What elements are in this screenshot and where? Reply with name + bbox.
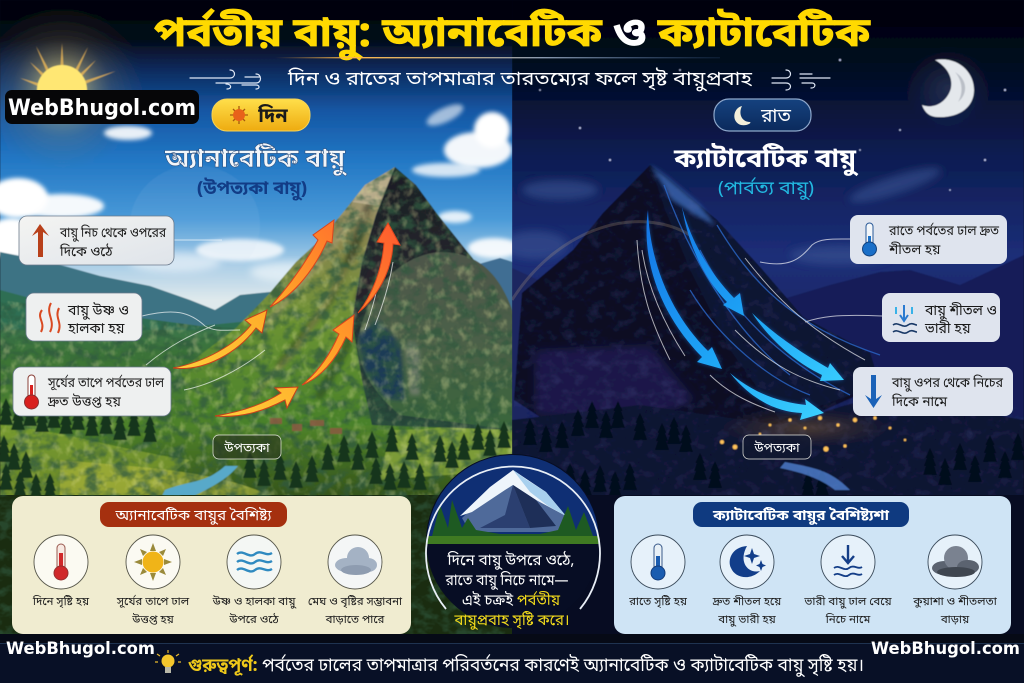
pill: night: রাত — [760, 105, 791, 130]
arrows: sinking cold air (katabatic) — [647, 207, 844, 420]
footer bar — [0, 643, 1024, 683]
item: heavy air — [803, 535, 892, 628]
heading: anabatic — [164, 142, 348, 202]
icon: blue thermometer — [862, 223, 876, 256]
night ground — [512, 403, 1024, 495]
arrow: right upper — [682, 207, 744, 316]
panel: night landscape — [503, 0, 1024, 510]
arrow: left lower — [730, 373, 824, 420]
arrows: rising warm air (anabatic) — [173, 220, 400, 416]
arrow: right lower — [752, 313, 844, 381]
heading: katabatic: (পার্বত্য বায়ু) — [718, 177, 814, 202]
center circle summary — [426, 454, 600, 632]
center circle summary: এই চক্রই পর্বতীয় — [462, 590, 560, 612]
pill: day: দিন — [257, 103, 288, 131]
subtitle: দিন ও রাতের তাপমাত্রার তারতম্যের ফলে সৃষ্ট বায়ুপ্রবাহ — [287, 67, 753, 93]
center circle summary: দিনে বায়ু উপরে ওঠে, — [447, 550, 574, 572]
callout: air sinks: দিকে নামে — [891, 393, 948, 412]
item: cloud: মেঘ ও বৃষ্টির সম্ভাবনা — [308, 594, 403, 610]
arrow: upper right — [358, 223, 400, 313]
stars — [539, 59, 1006, 191]
icon: wind right — [772, 70, 830, 90]
arrow: upper left — [270, 220, 334, 307]
mountain: lit face — [180, 167, 395, 430]
callout: warm light air — [26, 293, 142, 341]
night clouds — [503, 162, 943, 265]
item: fog cloud — [912, 535, 998, 628]
foreground trees — [0, 398, 517, 500]
item: day thermometer — [32, 535, 90, 610]
callout: cool heavy air: ভারী হয় — [924, 320, 971, 339]
valley village — [270, 418, 342, 434]
callout: warm light air: বায়ু উষ্ণ ও — [67, 302, 129, 321]
valley ground — [0, 330, 513, 510]
clouds: daytime sky — [0, 100, 520, 282]
label: valley left — [213, 435, 281, 459]
title: পর্বতীয় বায়ু: অ্যানাবেটিক ও ক্যাটাবেটিক — [154, 9, 871, 63]
glowing ridge streaks — [664, 185, 880, 395]
item: moon: দ্রুত শীতল হয়ে — [712, 594, 782, 610]
center circle summary: বায়ুপ্রবাহ সৃষ্টি করে। — [454, 610, 570, 632]
faint watermark arc — [512, 222, 690, 300]
panel: anabatic characteristics — [12, 496, 411, 634]
item: night thermometer: রাতে সৃষ্টি হয় — [628, 594, 688, 610]
pill: night — [714, 99, 811, 131]
logo: WebBhugol top-left — [5, 90, 199, 124]
rock and lens tint on shaded face — [357, 252, 513, 430]
panel title: ক্যাটাবেটিক বায়ুর বৈশিষ্ট্যশা — [712, 507, 890, 526]
callout: slope heats: সূর্যের তাপে পর্বতের ঢাল — [47, 373, 164, 393]
arrow: lower left — [173, 310, 267, 369]
callout: air sinks: বায়ু ওপর থেকে নিচের — [891, 374, 1004, 393]
callout: slope heats: দ্রুত উত্তপ্ত হয় — [47, 393, 121, 412]
callout: slope cools: রাতে পর্বতের ঢাল দ্রুত — [888, 221, 999, 241]
arrow: middle — [302, 315, 354, 385]
item: sun — [116, 535, 190, 628]
callout: air rises: বায়ু নিচ থেকে ওপরের — [59, 224, 167, 243]
item: waves: উপরে ওঠে — [228, 612, 279, 628]
scene: tree line — [432, 500, 593, 536]
distant night mountains — [787, 255, 1024, 420]
moon — [907, 52, 989, 119]
callout: cool heavy air: বায়ু শীতল ও — [924, 302, 997, 321]
panel title — [693, 502, 909, 527]
icon: heat waves — [40, 303, 60, 333]
heading: anabatic: অ্যানাবেটিক বায়ু — [164, 142, 348, 178]
mountain: shaded face — [352, 167, 513, 430]
item: day thermometer: দিনে সৃষ্টি হয় — [32, 594, 90, 610]
icon: bulb — [155, 650, 181, 673]
item: cloud: বাড়াতে পারে — [325, 612, 385, 628]
rock streaks on lit face — [250, 195, 372, 400]
scene: peak body — [462, 470, 566, 532]
item: fog cloud: কুয়াশা ও শীতলতা — [912, 594, 998, 610]
icon: small sun — [230, 106, 248, 124]
callout: slope heats — [13, 367, 171, 416]
panel: daytime landscape — [0, 0, 520, 510]
arrow: bottom — [215, 387, 298, 416]
panel: katabatic characteristics — [614, 496, 1011, 634]
logo: WebBhugol bottom-right: WebBhugol.com — [871, 639, 1020, 659]
item: moon — [712, 535, 782, 628]
distant hills — [0, 252, 271, 327]
icon: up arrow — [32, 224, 49, 257]
heading: katabatic — [673, 142, 859, 202]
river — [162, 465, 238, 495]
night trees — [513, 401, 1024, 498]
item: heavy air: নিচে নামে — [825, 612, 871, 628]
panel title: অ্যানাবেটিক বায়ুর বৈশিষ্ট্য — [114, 507, 273, 526]
lower band behind panels — [0, 495, 1024, 645]
icon: down arrow — [865, 375, 882, 408]
item: night thermometer — [628, 535, 688, 610]
footer bar: গুরুত্বপূর্ণ: পর্বতের ঢালের তাপমাত্রার পরিবর্তনের কারণেই অ্যানাবেটিক ও ক্যাটাবেটিক বায়ু সৃষ্টি হয়। — [188, 654, 864, 679]
callout: air sinks — [853, 367, 1013, 416]
scene: snow — [460, 470, 566, 516]
callout: air rises — [19, 216, 174, 265]
heading: katabatic: ক্যাটাবেটিক বায়ু — [673, 142, 859, 178]
logo: WebBhugol bottom-left: WebBhugol.com — [6, 639, 155, 659]
callout: slope cools: শীতল হয় — [888, 241, 941, 260]
item: moon: বায়ু ভারী হয় — [717, 612, 777, 628]
callout: warm light air: হালকা হয় — [67, 320, 125, 339]
watermark lens — [132, 166, 260, 232]
label: valley right — [743, 435, 811, 459]
logo: WebBhugol top-left: WebBhugol.com — [8, 96, 196, 121]
scene: circle sky — [427, 455, 599, 536]
item: fog cloud: বাড়ায় — [940, 612, 970, 628]
arrow: left upper — [647, 210, 722, 369]
center circle summary: রাতে বায়ু নিচে নামে— — [445, 570, 568, 592]
callout: air rises: দিকে ওঠে — [59, 242, 113, 262]
sun — [0, 10, 142, 158]
heading: anabatic: (উপত্যকা বায়ু) — [197, 178, 307, 202]
icon: small crescent — [734, 106, 750, 125]
item: sun: উত্তপ্ত হয় — [131, 612, 175, 628]
item: heavy air: ভারী বায়ু ঢাল বেয়ে — [803, 594, 892, 610]
label: valley right: উপত্যকা — [753, 440, 800, 458]
icon: red thermometer — [24, 375, 38, 409]
wind lines and callout leader lines — [142, 239, 882, 412]
callout: cool heavy air — [882, 293, 1000, 342]
item: waves — [212, 535, 296, 628]
title underline — [275, 57, 720, 58]
item: cloud — [308, 535, 403, 628]
icon: wind left — [190, 70, 260, 89]
mountain: dark — [514, 165, 880, 430]
night river — [780, 462, 850, 490]
pill: day — [212, 99, 310, 131]
panel title — [100, 502, 287, 527]
forest texture — [0, 160, 513, 510]
village lights — [715, 408, 906, 452]
callout: slope cools — [850, 215, 1007, 264]
item: waves: উষ্ণ ও হালকা বায়ু — [212, 594, 296, 610]
label: valley left: উপত্যকা — [223, 440, 270, 458]
icon: cold waves — [893, 305, 917, 333]
item: sun: সূর্যের তাপে ঢাল — [116, 594, 190, 610]
